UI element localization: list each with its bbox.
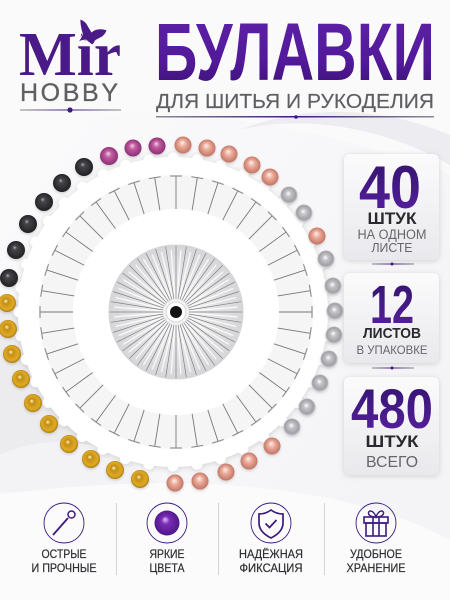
title rule [156, 115, 434, 119]
rose beads [166, 136, 326, 492]
feature: reliable fixing [239, 503, 303, 575]
stat card: 12 sheets [344, 273, 439, 363]
icon: pin [44, 503, 84, 543]
label: ШТУК [366, 432, 419, 451]
hub [163, 299, 189, 325]
icon: gift [356, 503, 396, 543]
label: ХРАНЕНИЕ [346, 563, 406, 575]
stat card: 480 total [344, 377, 439, 475]
sublabel: ЛИСТЕ [372, 240, 413, 255]
feature: bright colours [147, 503, 187, 575]
logo wordmark Mir: Mir [19, 21, 121, 89]
label: ЦВЕТА [150, 563, 185, 575]
label: И ПРОЧНЫЕ [32, 563, 97, 575]
outer slotted band [56, 192, 296, 432]
white scalloped plate [18, 157, 328, 467]
pin wheel [0, 136, 344, 492]
feature: easy storage [346, 503, 406, 575]
number 40: 40 [359, 154, 421, 221]
icon: shield [251, 503, 291, 543]
label: ЛИСТОВ [363, 325, 421, 342]
label: НАДЁЖНАЯ [239, 549, 303, 561]
sublabel: НА ОДНОМ [358, 227, 426, 242]
sublabel: В УПАКОВКЕ [356, 343, 428, 357]
label: ОСТРЫЕ [42, 549, 87, 561]
label: ФИКСАЦИЯ [240, 563, 302, 575]
logo rule [20, 107, 121, 113]
logo: Mir Hobby [19, 19, 121, 113]
magenta beads [100, 138, 166, 165]
gold beads [0, 294, 149, 488]
logo HOBBY: HOBBY [20, 79, 118, 107]
number 480: 480 [351, 377, 433, 440]
logo butterfly [78, 19, 107, 45]
label: ЯРКИЕ [150, 549, 185, 561]
black beads [0, 158, 93, 287]
sublabel: ВСЕГО [366, 454, 418, 471]
silver beads [280, 186, 344, 436]
number 12: 12 [370, 275, 414, 335]
radial pins [20, 156, 332, 468]
label: ШТУК [368, 209, 417, 228]
subtitle: ДЛЯ ШИТЬЯ И РУКОДЕЛИЯ [156, 91, 434, 113]
card divider [372, 262, 414, 266]
icon: purple bead [147, 503, 187, 543]
card divider [372, 366, 414, 370]
stat card: 40 pieces [344, 154, 439, 260]
label: УДОБНОЕ [350, 549, 402, 561]
centre well [109, 245, 243, 379]
feature: sharp and strong [32, 503, 97, 575]
